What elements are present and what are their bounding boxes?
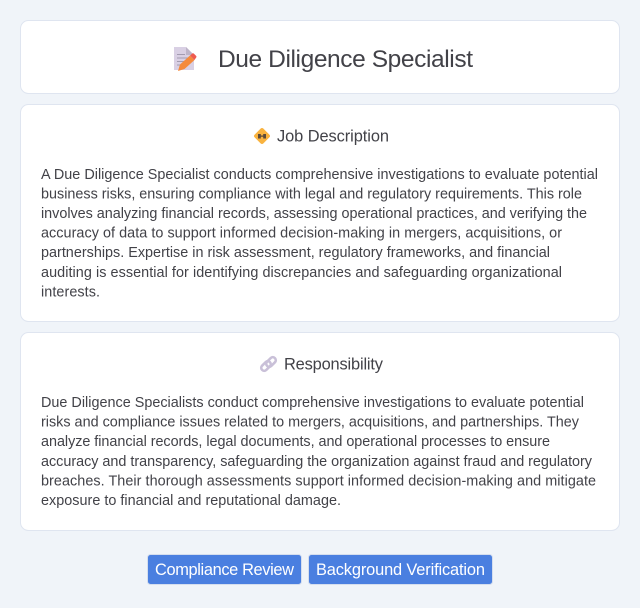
text block: job description: business risks, ensuring compliance with legal and regulatory requirements. This role [41, 186, 582, 202]
text block: job description: accuracy of data to support informed decision-making in mergers, acquisitions, or [41, 226, 562, 242]
text block: job description: partnerships. Expertise in risk assessment, regulatory frameworks, and financial [41, 245, 550, 261]
text block: responsibility: exposure to financial and reputational damage. [41, 493, 341, 509]
button: background verification [308, 554, 492, 584]
text block: responsibility: Due Diligence Specialists conduct comprehensive investigations to evaluate potential [41, 395, 584, 411]
text block: job description: A Due Diligence Specialist conducts comprehensive investigations to evaluate potential [41, 167, 598, 183]
panel: title card [20, 20, 620, 94]
text block: job description: interests. [41, 284, 100, 300]
text block: responsibility: breaches. Their thorough assessments support informed decision-making and mitigate [41, 473, 596, 489]
panel: responsibility [20, 332, 620, 530]
button: compliance review: Compliance Review [155, 561, 294, 579]
icon: orange diamond sign [253, 127, 271, 145]
text block: job description [41, 167, 598, 300]
panel: job description [20, 104, 620, 322]
button: background verification: Background Verification [316, 561, 485, 579]
icon: document with pencil [174, 47, 196, 71]
button: compliance review [148, 554, 302, 584]
text block: responsibility: risks and compliance issues related to mergers, acquisitions, and partnerships. They [41, 415, 580, 431]
icon: chain link [260, 356, 277, 372]
text block: responsibility [41, 395, 596, 509]
heading: job description: Job Description [277, 128, 389, 146]
text block: job description: auditing is essential for identifying discrepancies and safeguarding organizational [41, 265, 562, 281]
title: Due Diligence Specialist [218, 46, 473, 73]
text block: job description: involves analyzing financial records, assessing operational practices, and verifying the [41, 206, 587, 222]
text block: responsibility: accuracy and transparency, safeguarding the organization against fraud and regulatory [41, 454, 593, 470]
text block: responsibility: analyze financial records, legal documents, and operational processes to ensure [41, 434, 550, 450]
heading: responsibility: Responsibility [284, 356, 384, 374]
